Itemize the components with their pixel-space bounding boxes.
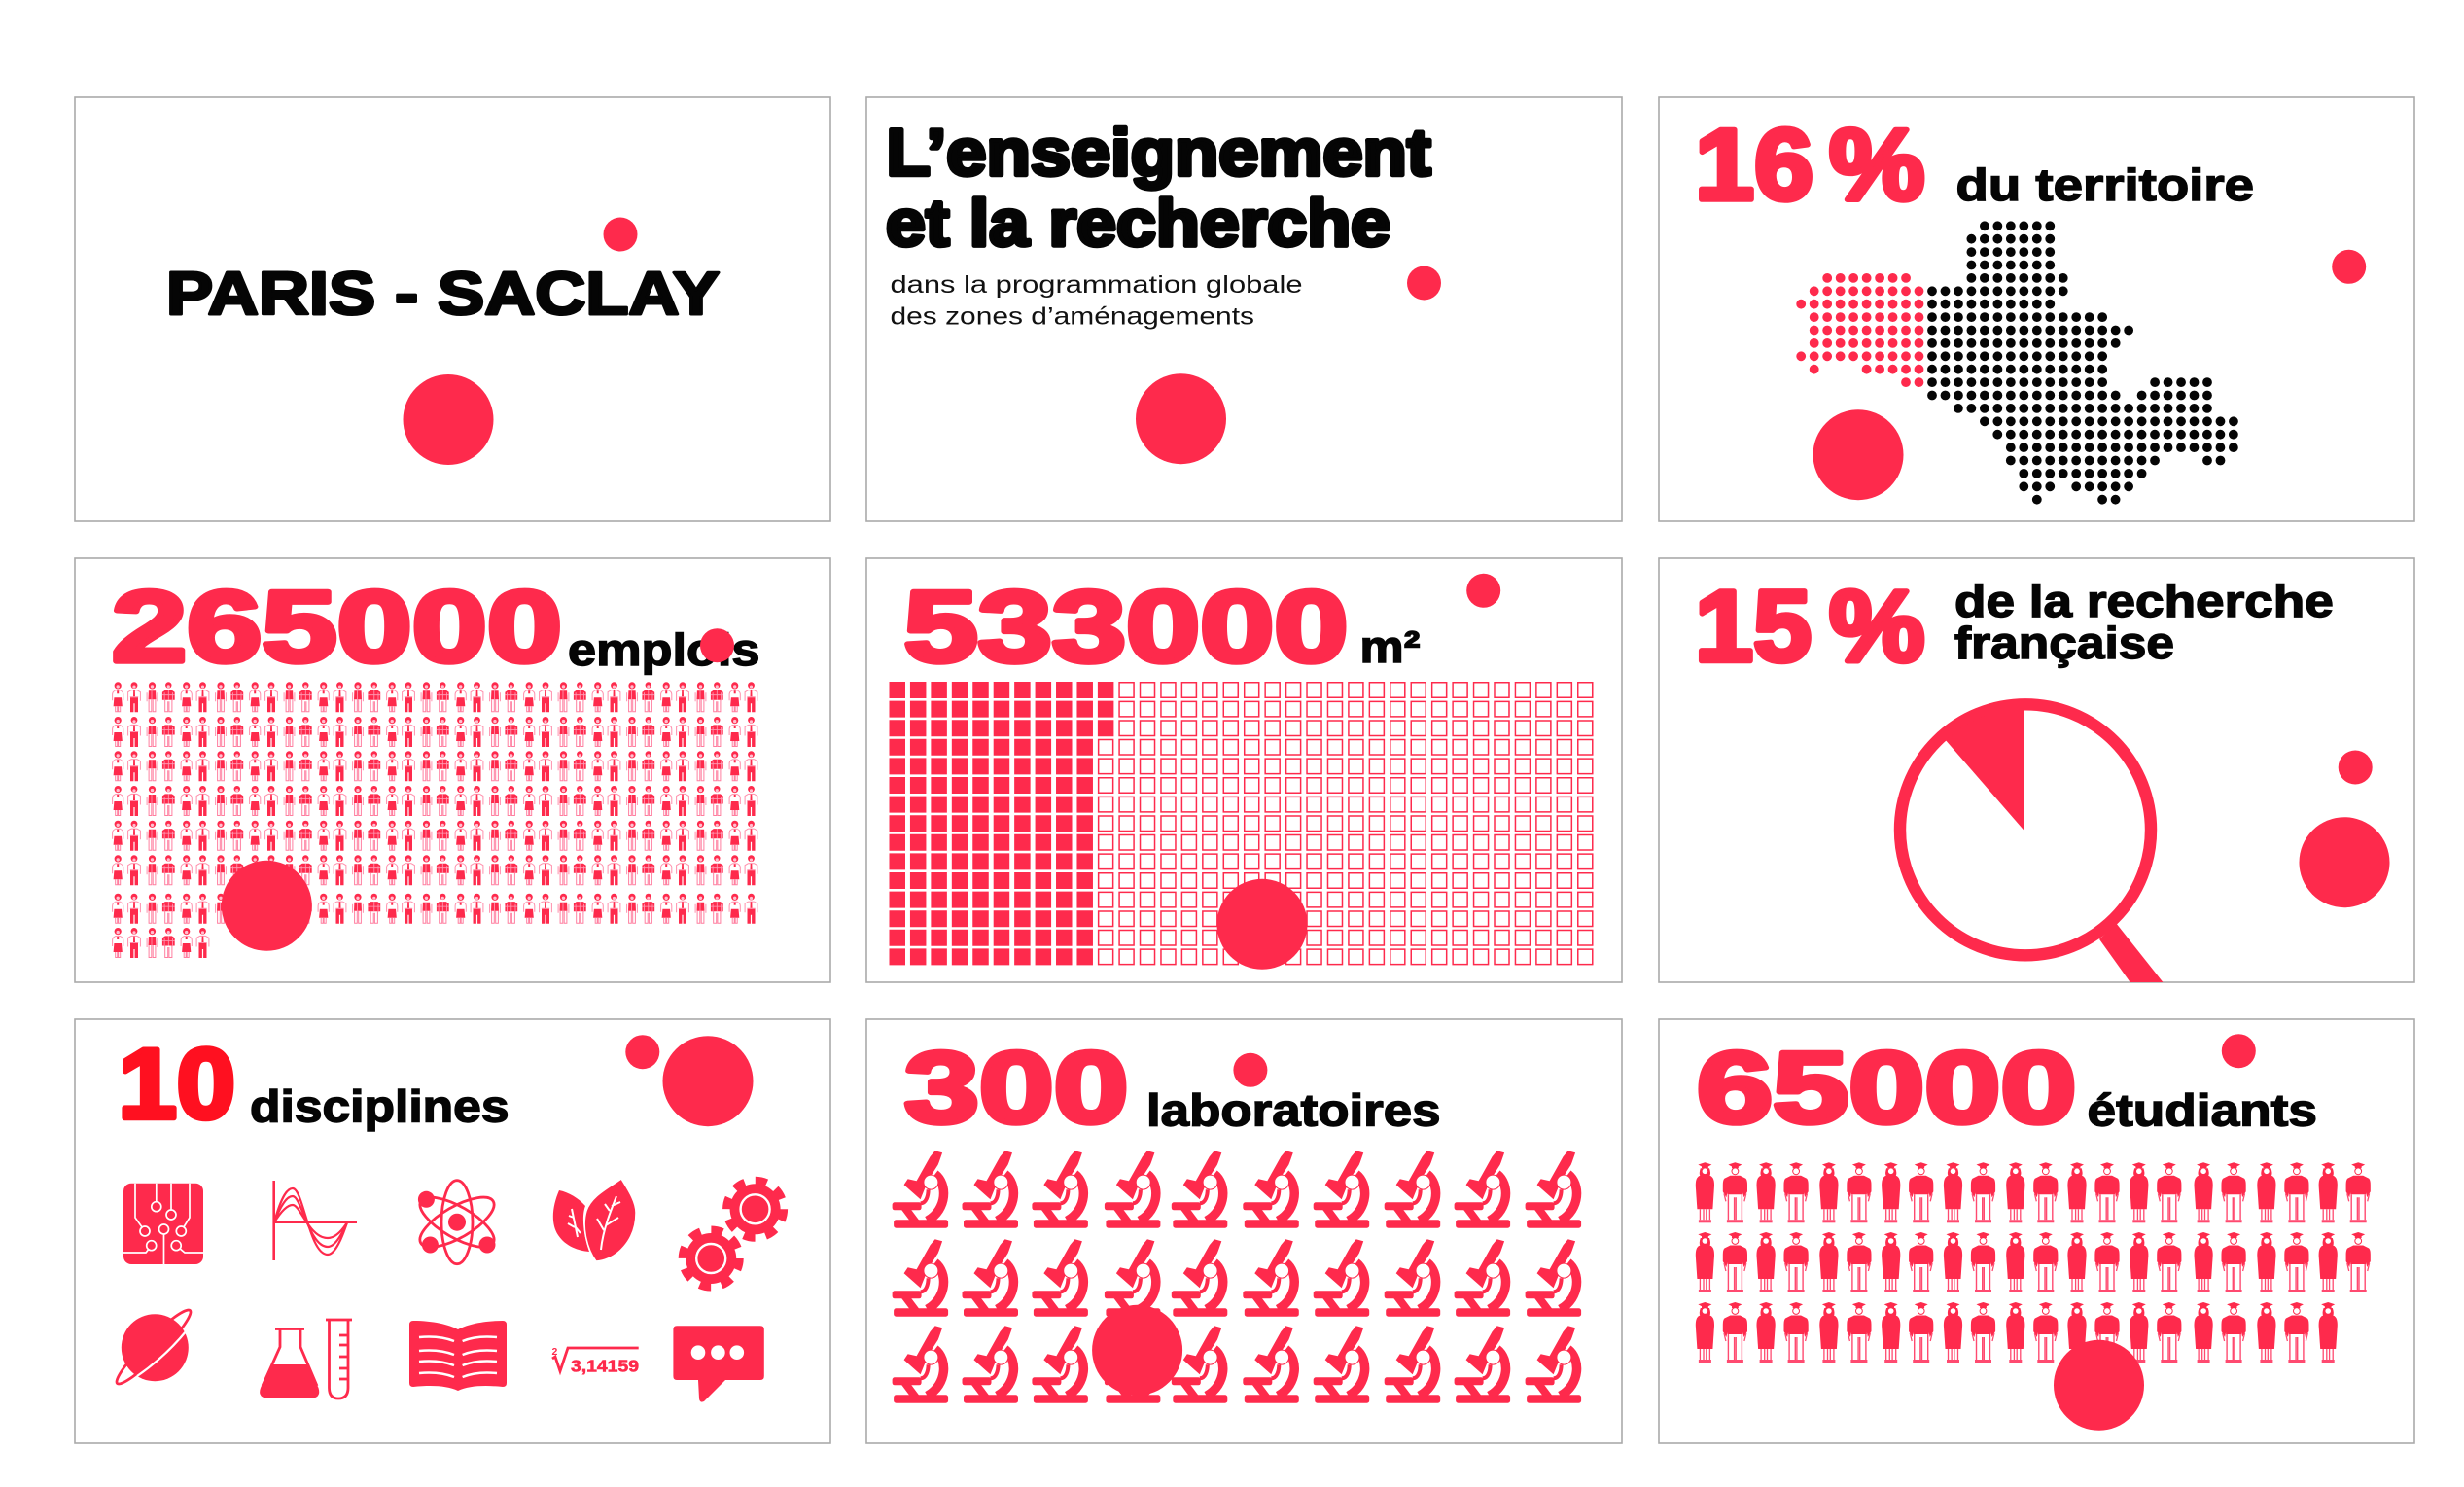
figure 16 %: 16 [1695, 109, 1813, 222]
icon: flask and test tube [260, 1320, 352, 1398]
subtitle: dans la programmation globale [891, 271, 1303, 299]
dot map: black territory [1932, 226, 2235, 500]
subtitle: des zones d’aménagements [891, 302, 1254, 330]
icon: square root [552, 1346, 639, 1375]
small circle [1407, 266, 1441, 300]
heading [886, 116, 1431, 261]
panel: 265000 emplois [75, 558, 830, 982]
figure 533000: 533000 [904, 571, 1348, 684]
title: PARIS - SACLAY [166, 261, 720, 328]
small circle [700, 628, 734, 662]
large circle [1136, 373, 1226, 464]
large circle [663, 1036, 753, 1126]
panel: enseignement et recherche [866, 97, 1622, 521]
small circle [2339, 751, 2373, 784]
panel: 10 disciplines [75, 1019, 830, 1443]
label: du territoire [1956, 159, 2254, 210]
figure 16 %: % [1829, 109, 1925, 222]
large circle [1092, 1305, 1182, 1396]
icon: square root: 2 [552, 1346, 558, 1358]
icon: speech bubble [673, 1326, 764, 1402]
pictogram grid: students [1696, 1162, 2371, 1363]
icon: atom [413, 1181, 501, 1264]
figure 15 %: 15 [1695, 570, 1812, 683]
label: emplois [568, 624, 760, 675]
label: disciplines [250, 1081, 510, 1132]
magnifier with pie slice [1900, 704, 2165, 984]
panel: 533000 m2 [866, 558, 1622, 982]
small circle [1466, 574, 1500, 608]
panel: 16 % du territoire [1659, 97, 2414, 521]
icon: leaves [553, 1179, 636, 1261]
figure 300: 300 [904, 1032, 1128, 1145]
icon: square root: 3,14159 [571, 1356, 639, 1375]
icon: circuit [123, 1184, 203, 1264]
panel: 300 laboratoires [866, 1019, 1622, 1443]
heading: L’enseignement [887, 116, 1431, 190]
large circle [222, 861, 312, 951]
figure 16 % [1695, 109, 1925, 222]
icon: planet [111, 1304, 196, 1390]
icon: wave [274, 1181, 357, 1260]
label: m² [1359, 621, 1420, 672]
large circle [1217, 879, 1307, 970]
panel: 65000 etudiants [1659, 1019, 2414, 1443]
subtitle [891, 271, 1303, 330]
label: française [1954, 618, 2174, 668]
icon: gears [685, 1183, 782, 1285]
large circle [2299, 817, 2390, 907]
figure 15 %: % [1829, 570, 1925, 683]
panel: Paris-Saclay title [75, 97, 830, 521]
label: étudiants [2087, 1085, 2317, 1136]
figure 10: 10 [119, 1029, 235, 1140]
label [1954, 576, 2334, 668]
small circle [2222, 1034, 2256, 1068]
square grid [889, 690, 1594, 957]
icon: book [409, 1321, 507, 1391]
large circle [403, 374, 494, 465]
small circle [1233, 1053, 1267, 1087]
figure 15 % [1695, 570, 1925, 683]
large circle [2054, 1340, 2144, 1431]
small circle [2332, 250, 2366, 284]
pictogram grid: microscopes [893, 1151, 1581, 1403]
heading: et la recherche [886, 187, 1390, 261]
label: de la recherche [1954, 576, 2334, 626]
panel: 15 % de la recherche [1659, 558, 2414, 984]
figure 265000: 265000 [112, 571, 562, 684]
dot map: red zone [1801, 278, 1919, 382]
small circle [625, 1035, 659, 1069]
small circle [603, 218, 638, 251]
pictogram grid: people [113, 682, 757, 958]
large circle [1813, 409, 1904, 500]
figure 65000: 65000 [1697, 1032, 2077, 1145]
label: laboratoires [1146, 1085, 1441, 1136]
